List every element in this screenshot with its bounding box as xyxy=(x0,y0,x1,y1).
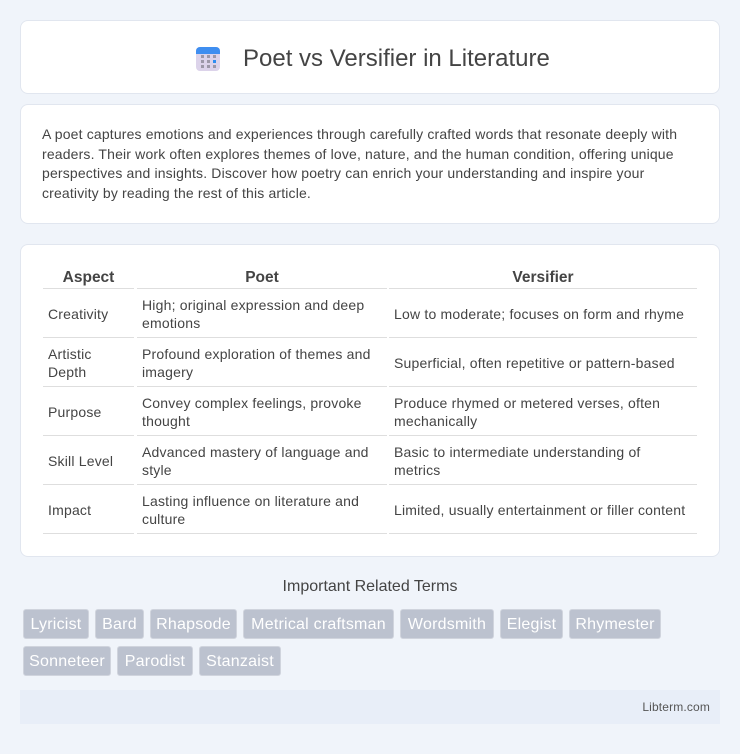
row: Artistic Depth: Superficial, often repetitive or pattern-based xyxy=(394,355,675,371)
row: Impact: Limited, usually entertainment or filler content xyxy=(394,502,685,518)
row: Skill Level: Skill Level xyxy=(48,453,113,469)
title panel xyxy=(20,20,720,94)
row: Artistic Depth: Profound exploration of themes and xyxy=(142,346,371,362)
row: Skill Level: Basic to intermediate understanding of xyxy=(394,444,641,460)
row: Skill Level: metrics xyxy=(394,462,441,478)
footer credit: Libterm.com xyxy=(642,700,710,714)
row: Creativity: High; original expression and deep xyxy=(142,297,364,313)
icon: calendar xyxy=(196,47,220,71)
footer bar xyxy=(20,690,720,724)
row: Purpose: thought xyxy=(142,413,190,429)
comparison table xyxy=(43,269,697,534)
header: Versifier: Versifier xyxy=(512,269,574,286)
related terms tags: Lyricist xyxy=(31,616,81,633)
intro text xyxy=(42,126,677,201)
row: Artistic Depth: imagery xyxy=(142,364,193,380)
row: Purpose: Purpose xyxy=(48,404,102,420)
row: Impact xyxy=(48,493,686,527)
row: Skill Level: style xyxy=(142,462,172,478)
related terms heading: Important Related Terms xyxy=(283,578,457,595)
row: Purpose: mechanically xyxy=(394,413,477,429)
related terms tags: Bard xyxy=(102,616,137,633)
related terms tags: Sonneteer xyxy=(29,653,105,670)
panel: comparison table xyxy=(20,244,720,557)
row: Impact: culture xyxy=(142,511,185,527)
row: Artistic Depth: Artistic xyxy=(48,346,92,362)
related terms tags: Rhapsode xyxy=(156,616,231,633)
row: Purpose: Produce rhymed or metered verses, often xyxy=(394,395,660,411)
row: Artistic Depth xyxy=(48,346,675,380)
intro text: creativity by reading the rest of this article. xyxy=(42,185,311,201)
panel: introduction xyxy=(20,104,720,224)
title: Poet vs Versifier in Literature xyxy=(243,45,550,72)
related terms tags: Wordsmith xyxy=(408,616,486,633)
related terms tags: Stanzaist xyxy=(206,653,274,670)
header: Poet: Poet xyxy=(245,269,279,286)
header: Aspect: Aspect xyxy=(63,269,114,286)
related terms tags: Metrical craftsman xyxy=(251,616,386,633)
row: Purpose xyxy=(48,395,660,429)
row: Creativity: emotions xyxy=(142,315,200,331)
related terms tags: Elegist xyxy=(507,616,556,633)
row: Artistic Depth: Depth xyxy=(48,364,86,380)
intro text: readers. Their work often explores themes of love, nature, and the human condition, offering unique xyxy=(42,146,674,162)
row: Purpose: Convey complex feelings, provoke xyxy=(142,395,362,411)
related terms tags: Parodist xyxy=(125,653,185,670)
row: Skill Level: Advanced mastery of language and xyxy=(142,444,369,460)
row: Creativity xyxy=(48,297,684,331)
row: Creativity: Low to moderate; focuses on form and rhyme xyxy=(394,306,684,322)
related terms tags xyxy=(23,609,661,676)
row: Creativity: Creativity xyxy=(48,306,108,322)
intro text: perspectives and insights. Discover how poetry can enrich your understanding and inspire your xyxy=(42,165,644,181)
row: Skill Level xyxy=(48,444,641,478)
row: Impact: Lasting influence on literature and xyxy=(142,493,359,509)
related terms tags: Rhymester xyxy=(575,616,655,633)
intro text: A poet captures emotions and experiences through carefully crafted words that resonate deeply with xyxy=(42,126,677,142)
row: Impact: Impact xyxy=(48,502,91,518)
